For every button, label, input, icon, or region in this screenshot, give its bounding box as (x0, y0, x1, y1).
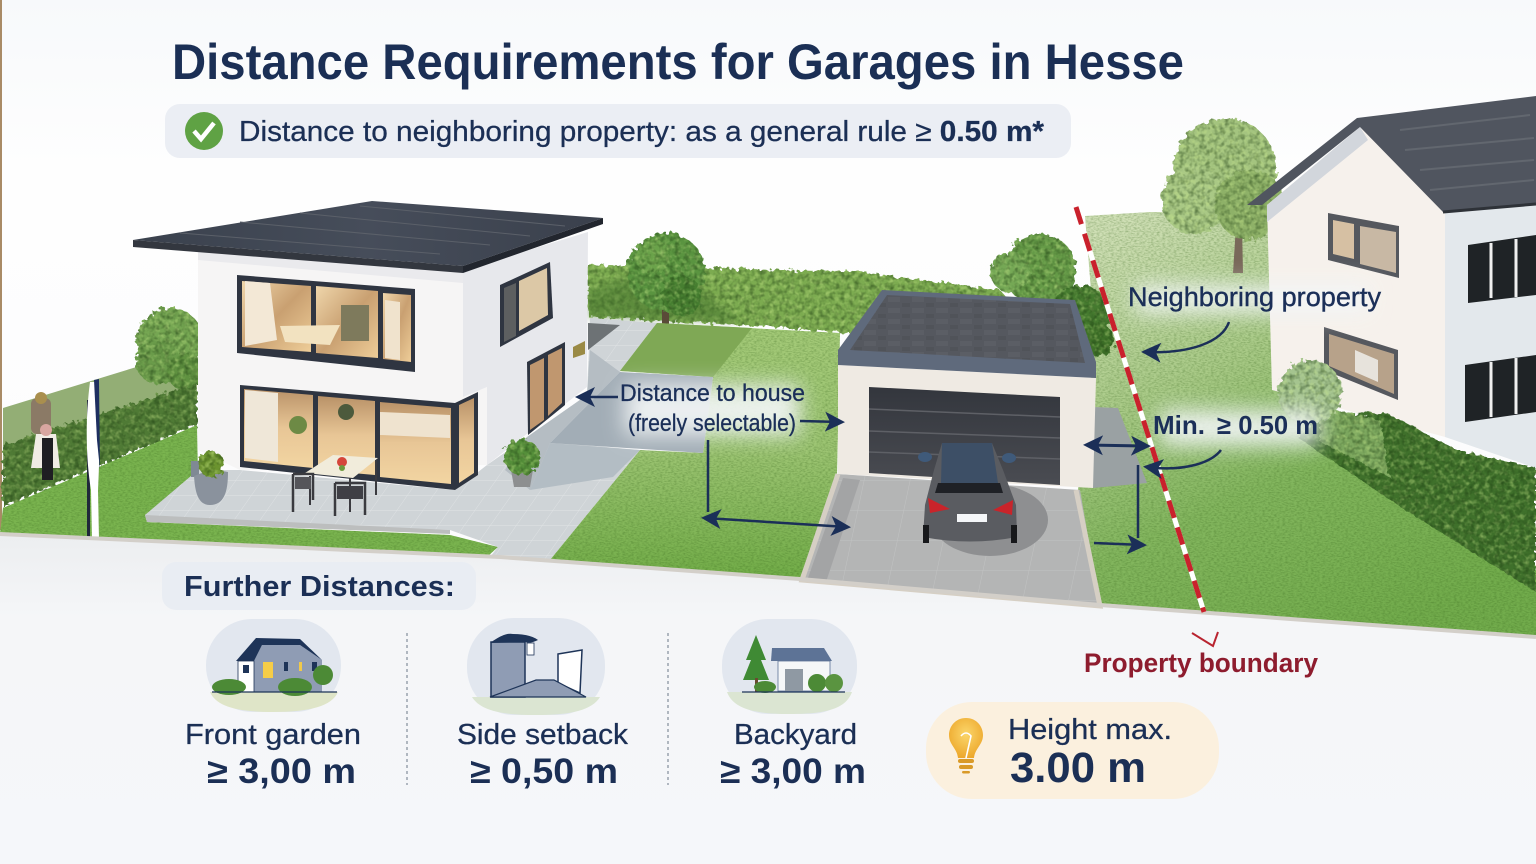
upper window (237, 275, 415, 372)
gable wall (1267, 127, 1445, 437)
hedge shade (588, 280, 740, 322)
garage door (869, 387, 1060, 485)
wall plate (573, 341, 585, 358)
scene: back hedge (588, 233, 1114, 356)
roof shading (1400, 115, 1534, 190)
car tail lights (928, 498, 1013, 515)
icon: check mark (185, 112, 223, 150)
car (918, 443, 1017, 543)
label: Backyard (734, 719, 857, 751)
left image edge (0, 0, 2, 530)
item: backyard (720, 619, 866, 791)
icon: front garden house (206, 619, 341, 712)
car roof glass (941, 443, 998, 483)
shaded path (505, 350, 620, 490)
side wall (1445, 203, 1536, 468)
arrow: minimum distance (1147, 450, 1221, 468)
label: Height max. (1008, 714, 1172, 746)
value: 3.00 m (1010, 744, 1146, 792)
light hedge section (1320, 407, 1390, 477)
label: Front garden (185, 719, 361, 751)
item: side setback (457, 618, 629, 791)
value: ≥ 0,50 m (470, 752, 618, 791)
value: ≥ 3,00 m (720, 752, 866, 791)
wheels (923, 525, 1017, 543)
scene: main house (133, 201, 603, 516)
eave shadow (198, 250, 463, 283)
scene: neighbouring house (1247, 96, 1536, 468)
paved strip beside garage (1093, 407, 1147, 488)
soffit (1267, 127, 1368, 222)
dark path head (588, 323, 620, 350)
callout: height (926, 702, 1219, 799)
road (0, 535, 1536, 864)
people (31, 392, 60, 480)
planter right (504, 439, 540, 487)
tree beside garage (990, 234, 1114, 356)
scene: right hedge (1278, 360, 1536, 592)
scene: garage and driveway (802, 290, 1100, 606)
divider (406, 633, 408, 785)
value: ≥ 3,00 m (207, 752, 356, 791)
car rear glass (935, 483, 1003, 493)
driveway slabs (802, 474, 1100, 606)
garage wall (838, 365, 1096, 488)
label: distance to house: (freely selectable) (628, 410, 796, 437)
roof (133, 201, 603, 273)
gable window upper (1328, 213, 1399, 278)
lower window (240, 385, 478, 490)
divider (667, 633, 669, 785)
scene: left garden (0, 308, 498, 556)
property boundary arrow (1192, 632, 1218, 646)
icon: side setback (467, 618, 605, 715)
car shadow (932, 484, 1048, 556)
gable window lower (1324, 327, 1398, 400)
tree (627, 233, 705, 332)
side window lower (1465, 355, 1536, 422)
front wall (198, 250, 487, 470)
planter left (191, 451, 228, 505)
paved band across lawn (550, 372, 713, 453)
property boundary line (1076, 207, 1204, 612)
scene: right lawn (1078, 212, 1536, 636)
far meadow (3, 360, 197, 470)
side wall (463, 232, 588, 465)
driveway paver strip (808, 478, 860, 582)
left hedge (3, 383, 197, 507)
arrow: to house (579, 396, 618, 398)
central lawn (550, 323, 840, 578)
label: minimum distance: Min. (1153, 410, 1205, 440)
rule text: Distance to neighboring property: as a general rule ≥ 0.50 m* (239, 116, 1045, 148)
mirrors (918, 452, 1016, 463)
label glows (625, 285, 1370, 446)
hedge (1297, 413, 1536, 592)
arrow: driveway distance (705, 440, 847, 527)
icon: light bulb (949, 718, 983, 774)
corner bush (1278, 360, 1342, 424)
icon: backyard (722, 619, 857, 714)
number plate (957, 514, 987, 522)
curb (0, 534, 1536, 637)
lawn shade (620, 323, 752, 377)
item: front garden (185, 619, 361, 791)
label: Side setback (457, 719, 629, 751)
arrow: neighboring property (1145, 322, 1229, 352)
roof edge (1443, 204, 1536, 212)
label: distance to house (620, 380, 805, 437)
car body (923, 443, 1017, 542)
scene: tree behind neighbour house (1161, 118, 1285, 273)
left lawn (0, 425, 498, 556)
arrow: double width (1087, 445, 1147, 446)
roof (1247, 96, 1536, 212)
side window upper (1468, 235, 1536, 303)
garage roof (850, 295, 1085, 363)
label: minimum distance (1153, 410, 1318, 440)
scene: walkway and terrace (145, 318, 657, 560)
hedge (588, 265, 1040, 335)
label: distance to house: Distance to house (620, 380, 805, 407)
paving joints (145, 318, 657, 560)
driveway border (802, 474, 1100, 606)
terrace lip (145, 515, 450, 534)
side door (527, 342, 565, 435)
label: property boundary: Property boundary (1084, 648, 1318, 678)
patio table and chairs (293, 455, 378, 516)
lower paved band (530, 443, 640, 490)
garage roof rim (838, 290, 1096, 378)
arrow: lower setback (1094, 465, 1143, 545)
label: minimum distance: ≥ 0.50 m (1217, 410, 1318, 440)
heading: further distances: Further Distances: (184, 571, 455, 603)
flag pole (87, 379, 100, 540)
title: Distance Requirements for Garages in Hesse (172, 34, 1184, 90)
label: neighboring property: Neighboring property (1128, 282, 1381, 312)
side upper window (500, 262, 553, 347)
left bush (136, 308, 204, 390)
rule pill (165, 104, 1071, 158)
heading: further distances (162, 562, 476, 610)
arrow: to garage (800, 421, 841, 422)
driveway (802, 474, 1100, 606)
